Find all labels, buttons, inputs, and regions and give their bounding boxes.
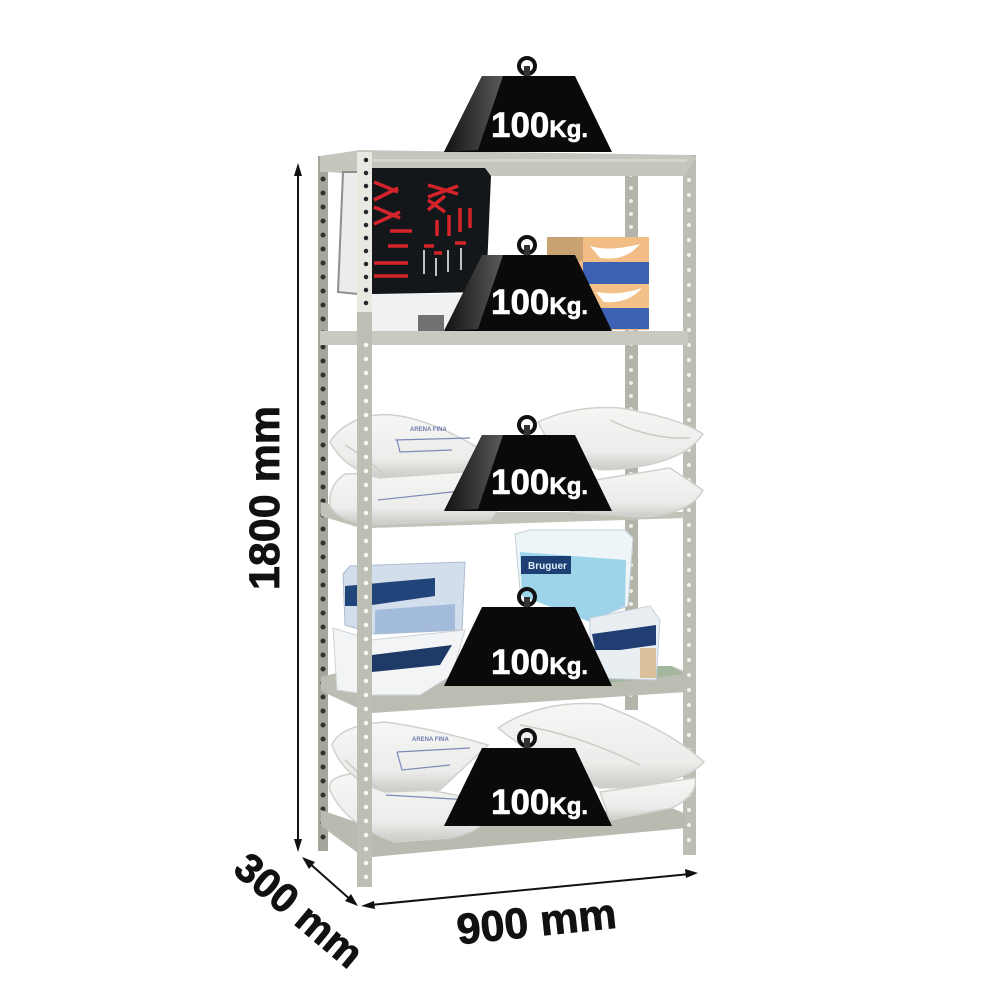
weight: 100 Kg bottom shelf bbox=[444, 730, 612, 826]
back right post bbox=[625, 170, 638, 710]
weight: 100 Kg shelf 3 bbox=[444, 417, 612, 511]
arrow: depth bbox=[302, 857, 358, 906]
weight: 100 Kg shelf 4: 100Kg. bbox=[491, 643, 588, 682]
front right post bbox=[683, 155, 696, 855]
shelf 2 bbox=[320, 331, 688, 345]
label: depth 300 mm: 300 mm bbox=[226, 844, 372, 977]
tool case on top shelf bbox=[338, 168, 491, 331]
weight: 100 Kg shelf 2: 100Kg. bbox=[491, 283, 588, 322]
sand bags on shelf 3 bbox=[330, 408, 703, 524]
weight: 100 Kg top shelf: 100Kg. bbox=[491, 106, 588, 145]
front left post bbox=[357, 152, 372, 887]
arrow: width bbox=[361, 869, 698, 909]
arrow: height bbox=[294, 163, 302, 852]
weight: 100 Kg shelf 2 bbox=[444, 237, 612, 331]
weight: 100 Kg shelf 3: 100Kg. bbox=[491, 463, 588, 502]
sand bags on shelf 5: ARENA FINA bbox=[412, 737, 449, 743]
paint buckets on shelf 4 bbox=[333, 530, 660, 695]
weight: 100 Kg top shelf bbox=[444, 58, 612, 152]
back left post bbox=[318, 156, 328, 851]
label: height 1800 mm: 1800 mm bbox=[241, 406, 289, 590]
shelf 3 bbox=[321, 502, 686, 528]
sand bags on shelf 5 bbox=[329, 704, 704, 842]
paint buckets on shelf 4: Bruguer bbox=[528, 561, 567, 572]
cardboard boxes on shelf 2 bbox=[547, 237, 649, 330]
weight: 100 Kg bottom shelf: 100Kg. bbox=[491, 783, 588, 822]
weight: 100 Kg shelf 4 bbox=[444, 589, 612, 686]
shelf 1 (top) bbox=[320, 150, 696, 176]
label: width 900 mm: 900 mm bbox=[454, 890, 619, 954]
shelf 4 bbox=[321, 666, 686, 713]
shelf 5 (bottom) bbox=[321, 808, 686, 857]
sand bags on shelf 3: ARENA FINA bbox=[410, 427, 447, 433]
